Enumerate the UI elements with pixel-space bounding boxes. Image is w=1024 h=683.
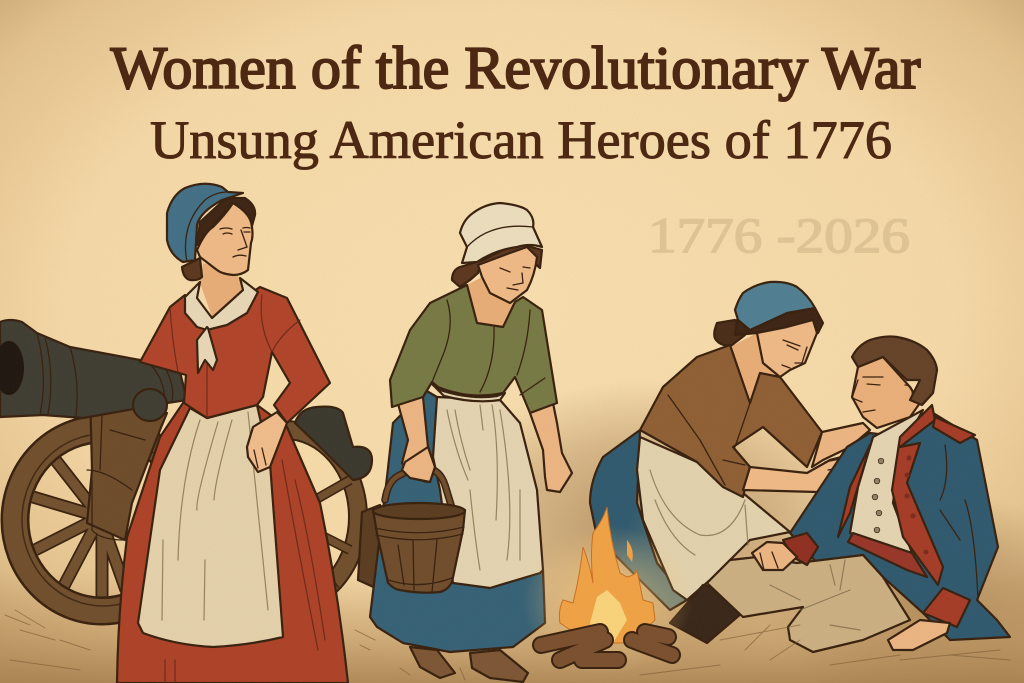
- hair bun: [182, 258, 202, 280]
- apron waistband: [432, 384, 505, 401]
- raised arm behind: [812, 423, 870, 467]
- hair: [735, 308, 823, 335]
- brown blouse: [640, 345, 822, 497]
- right lapel: [892, 405, 943, 585]
- hair: [197, 198, 255, 245]
- carriage: [87, 388, 167, 540]
- barrel: [0, 320, 187, 418]
- bodice seams: [170, 295, 300, 418]
- neck and chest: [200, 263, 243, 320]
- shoes: [410, 647, 528, 682]
- blue skirt: [370, 390, 545, 652]
- flames: [559, 507, 655, 643]
- far wheel: [212, 430, 358, 604]
- red bodice with arm: [140, 287, 330, 423]
- neck and chest: [730, 333, 780, 403]
- inner flame: [590, 590, 627, 643]
- ground grass: [5, 610, 1010, 680]
- blue cap: [735, 282, 815, 330]
- hand on handle: [402, 447, 435, 482]
- face features: [852, 377, 912, 412]
- forearm and hand: [743, 453, 860, 492]
- blouse seams: [432, 300, 545, 395]
- hands: [752, 542, 950, 650]
- cap fold: [185, 192, 228, 262]
- small flame: [627, 540, 633, 562]
- face features: [782, 340, 807, 368]
- blue cap: [167, 184, 243, 262]
- olive blouse: [390, 285, 557, 413]
- face: [478, 247, 537, 303]
- face: [852, 357, 920, 428]
- left cuff: [783, 533, 818, 565]
- waistcoat buttons: [872, 458, 884, 533]
- trouser folds: [770, 560, 860, 630]
- apron: [637, 437, 790, 600]
- red skirt folds: [165, 460, 325, 683]
- woman tending soldier: [590, 282, 870, 610]
- apron: [138, 405, 283, 647]
- faded date range: 1776 -2026: [648, 207, 910, 263]
- apron: [433, 397, 543, 588]
- collar: [185, 278, 258, 330]
- hand on apron: [247, 412, 287, 472]
- left lapel: [838, 445, 870, 537]
- hair: [852, 336, 937, 405]
- cannon: [0, 320, 380, 617]
- title: [110, 35, 921, 170]
- wounded soldier: [670, 336, 1010, 652]
- woman with bucket: [370, 203, 572, 682]
- face: [757, 320, 817, 377]
- barrel rings: [37, 333, 173, 416]
- tan trousers: [707, 555, 910, 652]
- trunnion: [133, 389, 167, 421]
- face: [197, 203, 252, 275]
- neckerchief tie: [197, 327, 217, 373]
- blouse seams: [668, 395, 750, 485]
- campfire: [522, 507, 692, 675]
- face features: [220, 228, 250, 257]
- epaulette: [933, 417, 975, 443]
- apron folds: [162, 412, 268, 620]
- ground haze: [0, 380, 1024, 683]
- cannon breech: [295, 407, 372, 480]
- neck and chest: [467, 277, 515, 327]
- title line 1: Women of the Revolutionary War: [110, 35, 921, 101]
- boot: [670, 585, 742, 643]
- carriage iron strap: [87, 388, 145, 540]
- right cuff: [923, 588, 970, 627]
- title line 2: Unsung American Heroes of 1776: [150, 110, 892, 170]
- hair bun: [714, 320, 745, 345]
- blue skirt: [590, 430, 687, 610]
- coat seams: [940, 445, 978, 600]
- muzzle: [0, 341, 24, 395]
- hair: [452, 243, 542, 287]
- apron folds: [447, 405, 520, 570]
- apron folds: [650, 470, 748, 555]
- red skirt: [117, 400, 348, 683]
- sash: [848, 533, 927, 577]
- far carriage end: [358, 505, 380, 590]
- woman with cannon: [117, 184, 348, 683]
- face features: [500, 267, 530, 290]
- cream cap: [460, 203, 542, 263]
- bucket: [373, 447, 465, 593]
- logs: [541, 632, 672, 660]
- near wheel: [15, 429, 189, 617]
- waistcoat: [850, 410, 923, 553]
- lapel buttons: [904, 456, 928, 554]
- blue coat: [790, 413, 1010, 640]
- bucket body: [373, 505, 465, 593]
- arms: [397, 397, 572, 492]
